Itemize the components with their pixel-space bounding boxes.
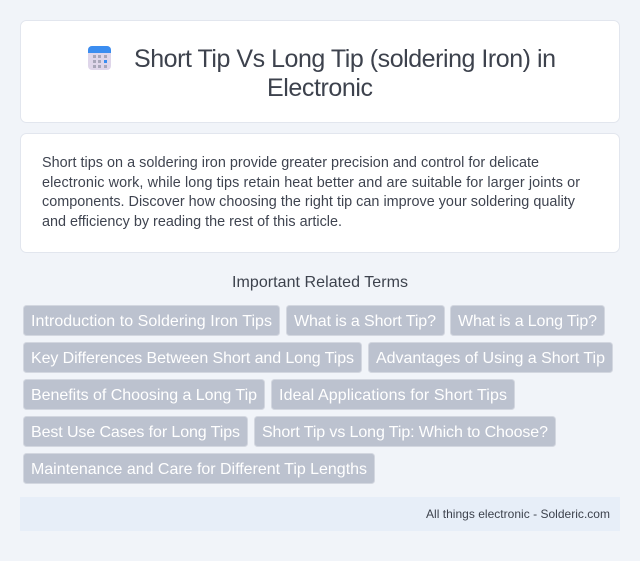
tag: best use cases: Best Use Cases for Long Tips [31,424,240,441]
tag: advantages [368,342,612,372]
tag: benefits: Benefits of Choosing a Long Tip [31,387,257,404]
header panel [20,20,620,122]
tag: short tip [286,306,444,336]
tag: which to choose [254,416,556,446]
title [134,45,556,102]
related terms tags [24,306,612,484]
tag: key differences [24,342,362,372]
intro panel [20,134,620,252]
footer [20,497,620,531]
tag: ideal applications [272,380,514,410]
tag: introduction [24,306,280,336]
tag: advantages: Advantages of Using a Short Tip [376,350,605,367]
tag: maintenance: Maintenance and Care for Different Tip Lengths [31,461,367,478]
tag: ideal applications: Ideal Applications for Short Tips [279,387,507,404]
tag: key differences: Key Differences Between Short and Long Tips [31,350,354,367]
intro text: electronic work, while long tips retain heat better and are suitable for larger joints or [42,175,580,191]
tag: best use cases [24,416,248,446]
tag: short tip: What is a Short Tip? [294,313,436,330]
icon: calendar [88,46,111,70]
tag: introduction: Introduction to Soldering Iron Tips [31,313,272,330]
title: Electronic [267,74,373,102]
tag: benefits [24,380,264,410]
footer: All things electronic - Solderic.com [426,507,610,521]
tag: maintenance [24,454,374,484]
intro text [42,155,580,230]
tag: which to choose: Short Tip vs Long Tip: Which to Choose? [262,424,548,441]
tag: long tip: What is a Long Tip? [458,313,597,330]
intro text: and efficiency by reading the rest of this article. [42,214,342,230]
title: Short Tip Vs Long Tip (soldering Iron) in [134,45,556,73]
intro text: components. Discover how choosing the right tip can improve your soldering quality [42,194,576,210]
tag: long tip [450,306,604,336]
related terms heading: Important Related Terms [232,274,408,291]
intro text: Short tips on a soldering iron provide greater precision and control for delicate [42,155,539,171]
